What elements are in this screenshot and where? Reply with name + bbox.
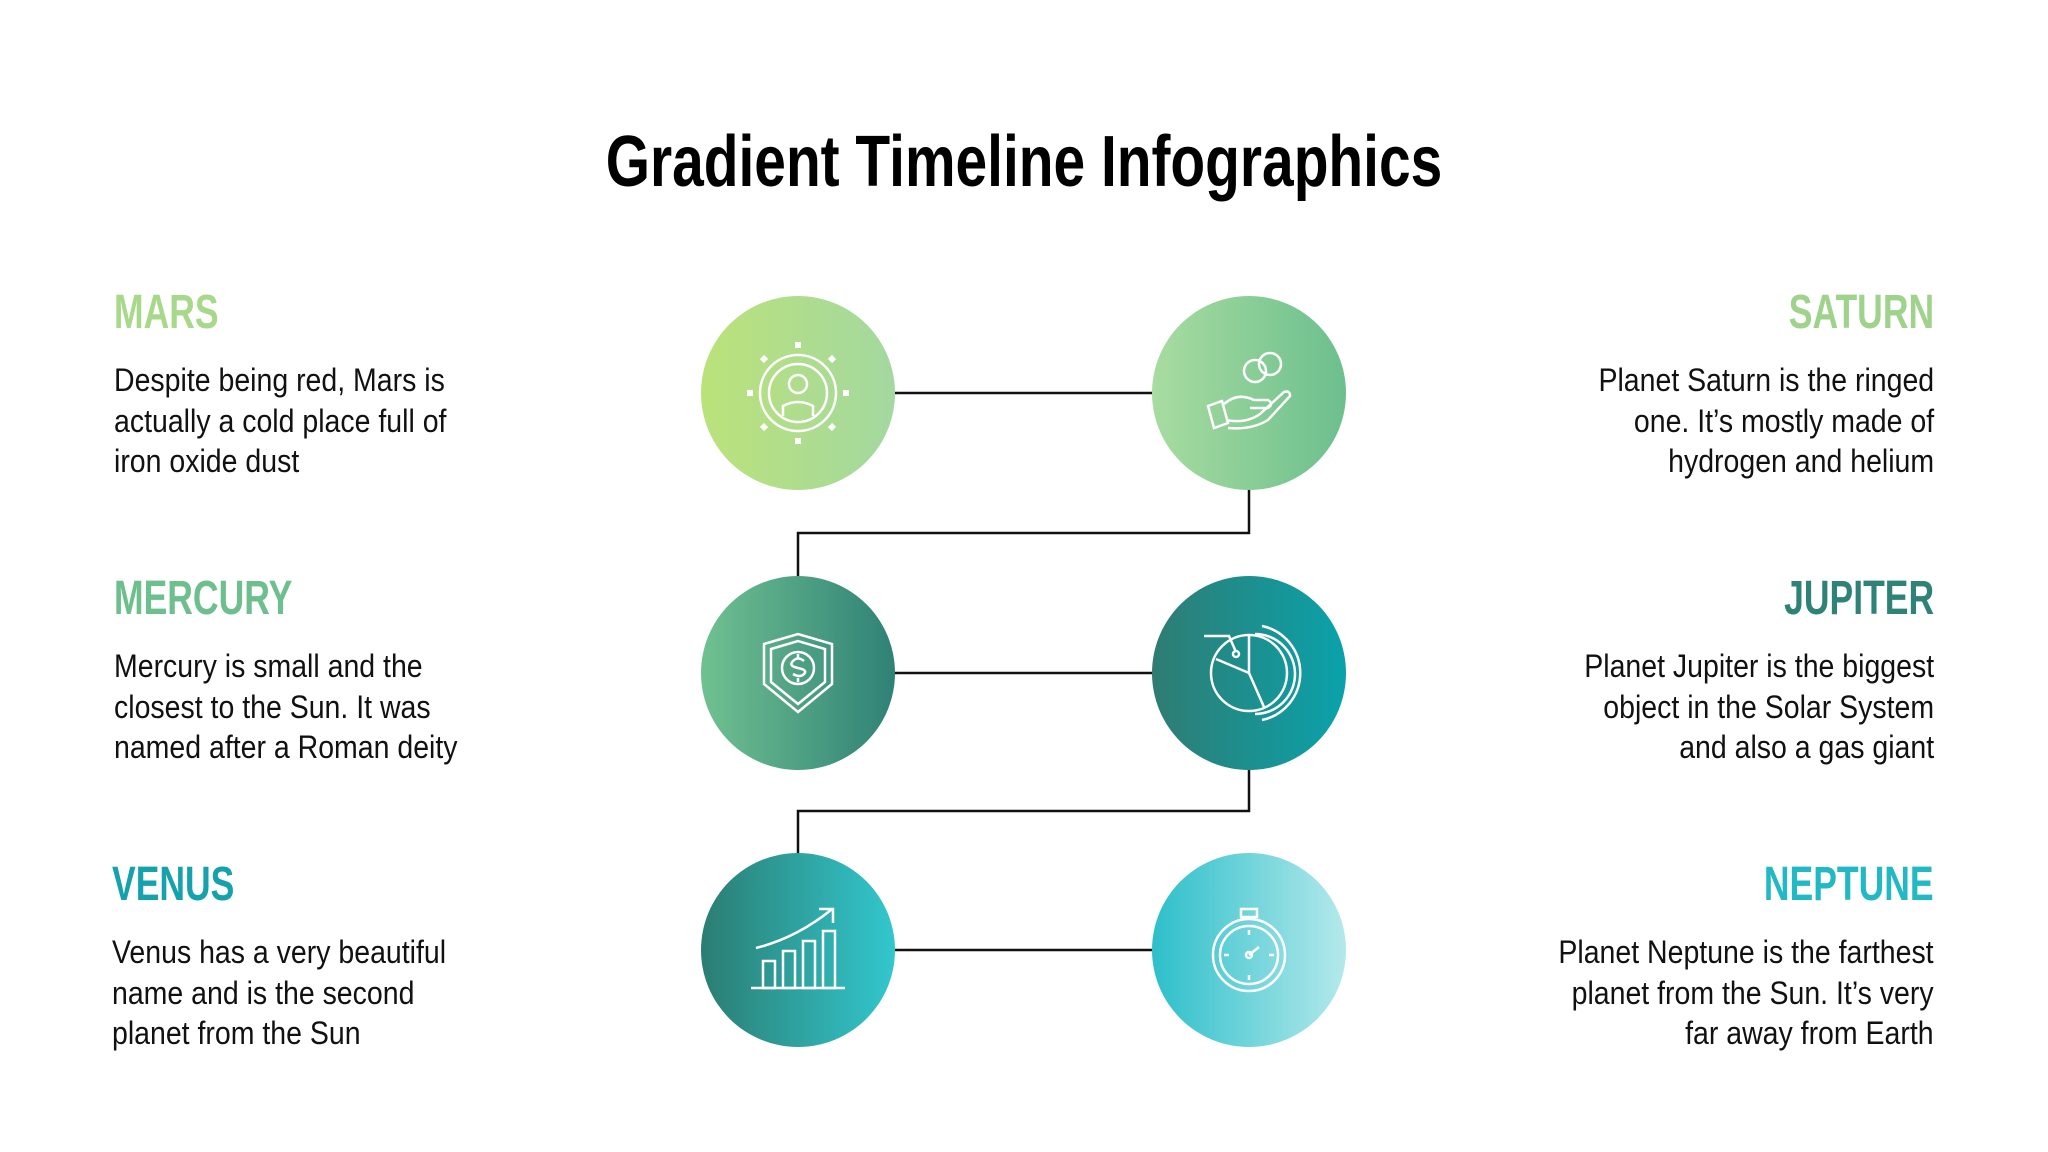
text block: venus: VENUS xyxy=(112,858,234,911)
circle: jupiter icon radar chart xyxy=(1152,576,1346,770)
text block: saturn: one. It’s mostly made of xyxy=(1634,402,1934,438)
text block: neptune: planet from the Sun. It’s very xyxy=(1572,974,1934,1010)
circle: venus icon growth chart xyxy=(701,853,895,1047)
text block: jupiter: Planet Jupiter is the biggest xyxy=(1584,648,1934,684)
text block: venus: Venus has a very beautiful xyxy=(112,934,446,970)
text block: neptune xyxy=(1559,858,1934,1051)
text block: jupiter xyxy=(1584,572,1934,765)
text block: jupiter: JUPITER xyxy=(1784,572,1934,625)
text block: venus xyxy=(112,858,446,1051)
text block: jupiter: object in the Solar System xyxy=(1603,688,1934,724)
text block: venus: planet from the Sun xyxy=(112,1015,361,1051)
circle: neptune icon stopwatch xyxy=(1152,853,1346,1047)
text block: mercury: Mercury is small and the xyxy=(114,648,423,684)
text block: neptune: far away from Earth xyxy=(1686,1015,1934,1051)
text block: mercury: closest to the Sun. It was xyxy=(114,688,431,724)
text block: saturn: Planet Saturn is the ringed xyxy=(1598,362,1934,398)
text block: mercury: named after a Roman deity xyxy=(114,729,458,765)
text block: mercury: MERCURY xyxy=(114,572,292,625)
text block: mars xyxy=(114,286,446,479)
circle: saturn icon hand coins xyxy=(1152,296,1346,490)
text block: saturn: hydrogen and helium xyxy=(1668,443,1934,479)
text block: mars: iron oxide dust xyxy=(114,443,299,479)
text block: mercury xyxy=(114,572,458,765)
title: Gradient Timeline Infographics xyxy=(606,122,1442,202)
circle: mars icon gear person xyxy=(701,296,895,490)
text block: mars: Despite being red, Mars is xyxy=(114,362,445,398)
text block: saturn xyxy=(1598,286,1934,479)
text block: saturn: SATURN xyxy=(1789,286,1934,339)
text block: mars: MARS xyxy=(114,286,219,339)
circle: mercury icon shield xyxy=(701,576,895,770)
text block: neptune: Planet Neptune is the farthest xyxy=(1559,934,1934,970)
text block: jupiter: and also a gas giant xyxy=(1679,729,1934,765)
text block: mars: actually a cold place full of xyxy=(114,402,446,438)
text block: venus: name and is the second xyxy=(112,974,414,1010)
text block: neptune: NEPTUNE xyxy=(1764,858,1934,911)
